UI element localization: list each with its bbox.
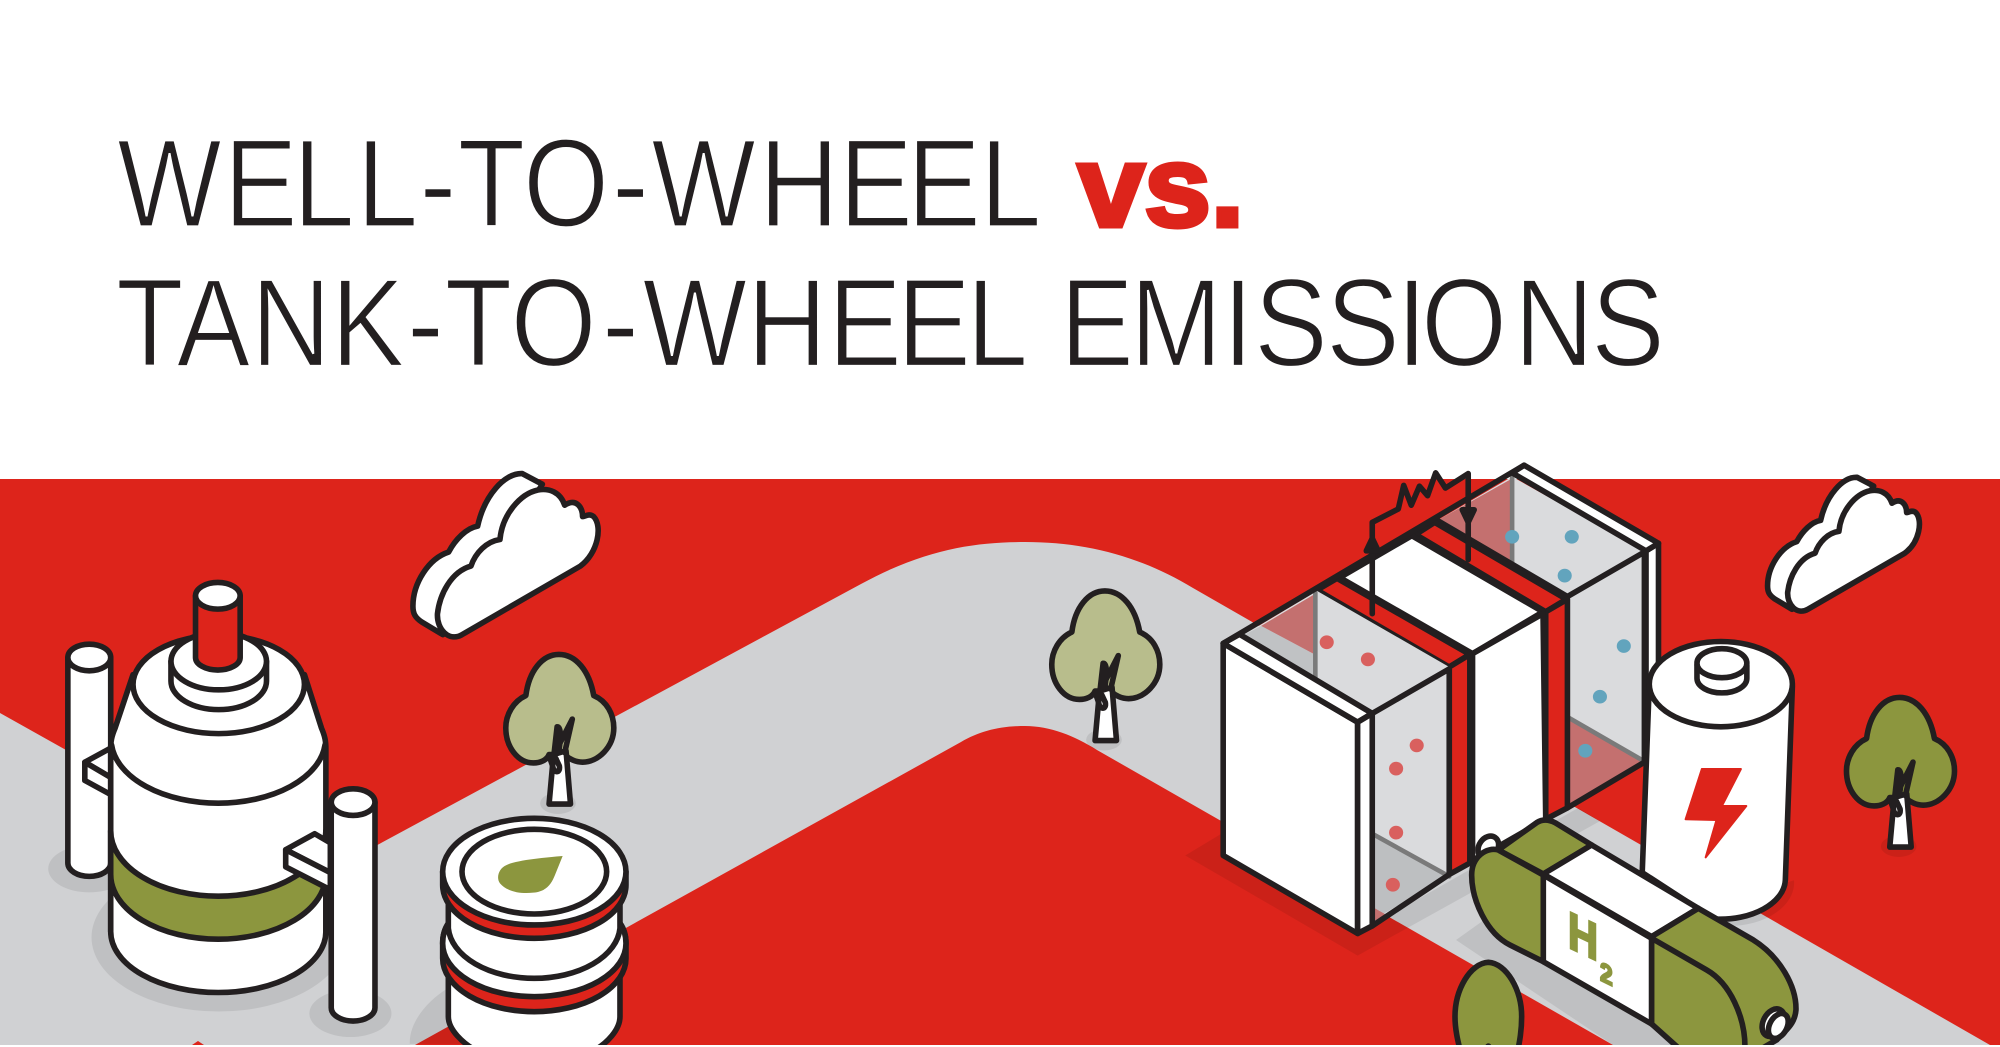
title: vs. (1078, 123, 1244, 251)
centre membrane (1340, 536, 1546, 861)
cloud right (1768, 477, 1919, 611)
H2 label: 2 (1600, 955, 1613, 992)
ground shadows (48, 845, 491, 1044)
refinery body (111, 633, 326, 992)
red dots (1320, 635, 1424, 892)
upper barrel (443, 818, 626, 978)
icon: leaf (498, 856, 563, 893)
front connector (1758, 1005, 1792, 1042)
H2 label (1568, 901, 1613, 992)
left red plate (1317, 578, 1470, 874)
right pipe (331, 789, 375, 1021)
title (116, 114, 1665, 394)
left bracket (85, 748, 111, 795)
title: TANK-TO-WHEEL EMISSIONS (116, 254, 1665, 394)
left pipe (68, 644, 111, 876)
cloud left (413, 474, 598, 637)
right red plate (1416, 522, 1567, 819)
left compartment (1241, 591, 1449, 926)
fuel cell stack (1185, 465, 1658, 956)
title: WELL-TO-WHEEL (117, 114, 1042, 254)
blue dots (1505, 530, 1631, 758)
tree 3 (1846, 697, 1954, 857)
chimney (196, 582, 240, 670)
lower barrel (443, 923, 626, 1047)
icon: lightning bolt (1686, 769, 1746, 857)
tank right end (1652, 908, 1796, 1047)
road (0, 542, 1990, 1045)
tree 1 (506, 654, 614, 814)
hydrogen tank (1472, 820, 1796, 1047)
H2 label: H (1568, 901, 1598, 973)
top edge line (1223, 465, 1524, 643)
battery (1642, 641, 1794, 926)
left front panel (1223, 634, 1372, 933)
refinery (68, 582, 375, 1021)
cell shadow (1185, 808, 1600, 956)
stacked barrels (443, 818, 626, 1047)
tank centre with H2 label (1543, 845, 1698, 1024)
wire with resistor and arrows (1366, 473, 1474, 614)
tank left end (1472, 820, 1592, 962)
tree 2 (1052, 591, 1160, 750)
bottom white edge (0, 1045, 2000, 1047)
hydrogen tank shadow (1456, 905, 1700, 1045)
right bracket (286, 834, 330, 890)
battery cap (1697, 649, 1747, 693)
tree 4 partially cropped (1455, 962, 1522, 1047)
back connector (1474, 832, 1503, 863)
right compartment (1437, 465, 1658, 808)
red background band (0, 479, 2000, 1045)
